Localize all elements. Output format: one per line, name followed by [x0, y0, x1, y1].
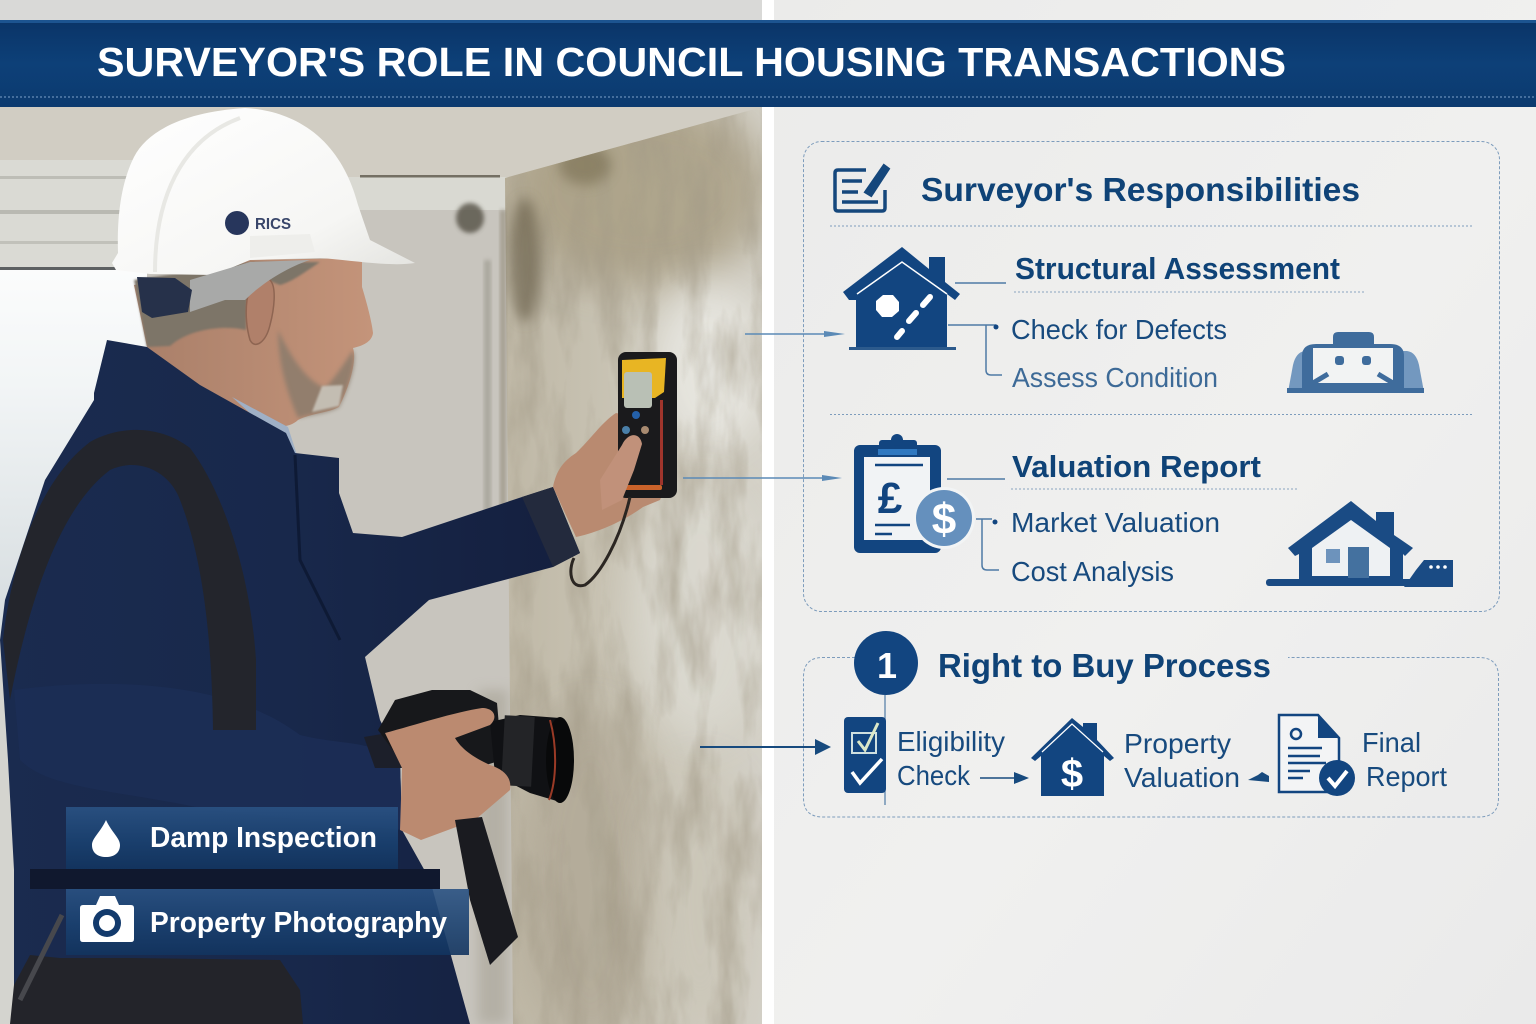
panel: inspection photograph	[0, 107, 762, 1024]
heading: right to buy process: Right to Buy Process	[938, 647, 1271, 684]
moisture meter	[618, 352, 677, 498]
window ledge and frame	[0, 160, 510, 271]
label: eligibility check	[897, 726, 1005, 791]
title: SURVEYOR'S ROLE IN COUNCIL HOUSING TRANSACTIONS	[97, 39, 1286, 85]
sleeve fold shading	[219, 710, 401, 830]
arrow: valuation to report	[1248, 772, 1269, 782]
icon: damaged house	[843, 247, 960, 350]
heading: surveyor's responsibilities: Surveyor's Responsibilities	[921, 171, 1360, 208]
icon: eligibility checklist	[844, 717, 886, 793]
side wall	[505, 107, 762, 1024]
label: final report: Report	[1366, 761, 1447, 792]
callout: property photography	[66, 889, 469, 955]
waist shoulder bag	[10, 915, 303, 1024]
RICS logo text: RICS	[255, 216, 291, 233]
label: eligibility check: Check	[897, 760, 971, 791]
shirt collar	[232, 397, 297, 455]
panel: right to buy process	[700, 631, 1498, 817]
label: property valuation: Valuation	[1124, 762, 1240, 793]
shoulder strap	[3, 430, 256, 730]
lower arm cuff	[364, 733, 402, 768]
step number badge	[854, 631, 918, 695]
icon: house with dollar: $	[1061, 752, 1083, 796]
hair and beard	[134, 262, 354, 418]
panel: right background	[774, 0, 1536, 1024]
connector lines: structural assessment	[948, 283, 1006, 375]
surveyor figure	[0, 108, 677, 1024]
item: assess condition: Assess Condition	[1012, 362, 1218, 393]
label: property valuation	[1124, 728, 1240, 793]
neck and face	[134, 258, 373, 426]
heading: valuation report: Valuation Report	[1012, 449, 1261, 484]
label: eligibility check: Eligibility	[897, 726, 1005, 757]
icon: valuation clipboard	[854, 434, 975, 553]
coin with dollar sign: $	[932, 495, 956, 544]
icon: house with outbuilding	[1266, 501, 1453, 587]
hat harness	[137, 260, 310, 318]
label: final report: Final	[1362, 727, 1421, 758]
label: property photography: Property Photography	[150, 907, 447, 939]
item: market valuation: Market Valuation	[1011, 507, 1220, 538]
icon: notepad with pencil	[835, 166, 888, 211]
icon: inspection scanner	[1287, 332, 1424, 393]
hard hat	[112, 108, 415, 275]
thumb over meter	[600, 435, 642, 510]
icon: final report document	[1279, 715, 1355, 796]
heading: structural assessment: Structural Assessment	[1015, 251, 1340, 286]
raised arm cuff	[522, 487, 580, 567]
top strip	[0, 0, 762, 20]
icon: house with dollar	[1031, 718, 1114, 796]
back wall	[147, 210, 513, 1024]
RICS logo mark	[225, 211, 249, 235]
lower door panel	[0, 644, 14, 1024]
belt shadow	[30, 869, 440, 889]
step number badge: 1	[877, 645, 897, 686]
camera wrist strap	[455, 817, 518, 965]
camera	[378, 690, 574, 803]
ceiling	[0, 107, 762, 177]
arrow: meter to structural assessment	[745, 331, 845, 337]
arrow: eligibility to valuation	[980, 772, 1029, 784]
jacket zip line	[295, 455, 340, 640]
meter cable	[571, 497, 630, 586]
label: property valuation: Property	[1124, 728, 1231, 759]
label: final report	[1362, 727, 1447, 792]
icon: camera	[80, 896, 134, 942]
panel: surveyor's responsibilities	[683, 142, 1500, 612]
navy jacket	[0, 340, 580, 1024]
raised hand	[553, 413, 661, 537]
camera hand	[385, 708, 510, 840]
label: damp inspection: Damp Inspection	[150, 822, 377, 854]
connector lines: valuation report	[947, 479, 1005, 570]
title banner	[0, 20, 1536, 107]
arrow: camera to process	[700, 739, 831, 755]
item: check for defects: Check for Defects	[1011, 314, 1227, 345]
callout: damp inspection	[66, 807, 398, 869]
ear	[246, 278, 274, 344]
damp and mould stains	[456, 95, 770, 1024]
window view	[0, 270, 150, 650]
icon: water drop	[92, 820, 120, 857]
pound symbol: £	[878, 474, 903, 523]
item: cost analysis: Cost Analysis	[1011, 556, 1174, 587]
arrow: meter to valuation report	[683, 475, 842, 481]
